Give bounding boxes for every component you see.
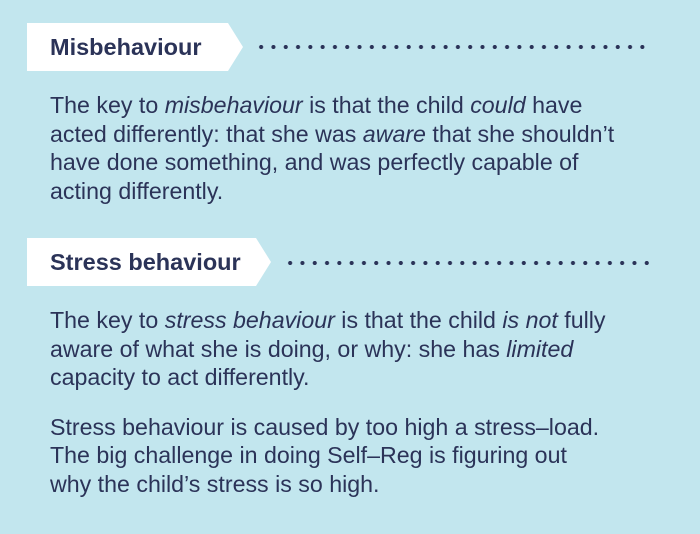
text block: misbehaviour bbox=[50, 92, 614, 204]
text block: stress behaviour: aware of what she is doing, or why: she has limited bbox=[50, 336, 573, 362]
heading: Misbehaviour: Misbehaviour bbox=[50, 34, 201, 60]
heading: Stress behaviour: Stress behaviour bbox=[50, 249, 241, 275]
text block: stress behaviour bbox=[50, 307, 606, 497]
dotted line bbox=[255, 45, 649, 49]
text block: stress behaviour: The key to stress behaviour is that the child is not fully bbox=[50, 307, 606, 333]
text block: misbehaviour: The key to misbehaviour is that the child could have bbox=[50, 92, 582, 118]
text block: misbehaviour: have done something, and was perfectly capable of bbox=[50, 149, 579, 175]
text block: misbehaviour: acted differently: that she was aware that she shouldn’t bbox=[50, 120, 614, 146]
text block: stress behaviour: why the child’s stress is so high. bbox=[50, 470, 380, 496]
text block: stress behaviour: Stress behaviour is caused by too high a stress–load. bbox=[50, 414, 599, 440]
heading: Misbehaviour bbox=[27, 23, 228, 71]
dotted line bbox=[284, 261, 653, 265]
text block: stress behaviour: capacity to act differently. bbox=[50, 364, 310, 390]
heading: Stress behaviour bbox=[27, 238, 256, 286]
text block: misbehaviour: acting differently. bbox=[50, 178, 223, 204]
text block: stress behaviour: The big challenge in doing Self–Reg is figuring out bbox=[50, 442, 567, 468]
